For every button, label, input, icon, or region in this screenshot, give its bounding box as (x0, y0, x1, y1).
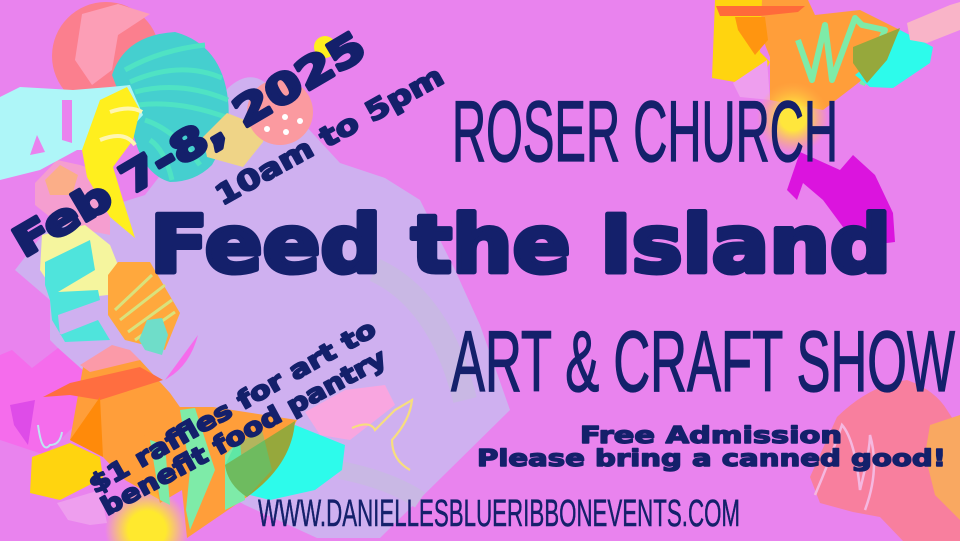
orange panel (755, 0, 900, 110)
salmon circle with dots (247, 79, 313, 145)
coral circle (52, 2, 160, 110)
yellow scribble (352, 400, 412, 470)
date: Feb 7-8, 2025 (5, 22, 374, 267)
cyan brush (250, 425, 345, 500)
teal striped dome (112, 32, 229, 182)
pink blob (35, 160, 110, 235)
orange scratched blob (108, 262, 180, 350)
raffle note: $1 raffles for art to (84, 314, 381, 499)
pink stipple brush (907, 2, 960, 43)
yellow patch (30, 443, 103, 500)
time: 10am to 5pm (209, 59, 449, 212)
green and orange stripes (143, 407, 297, 538)
bottom right coral blob (810, 380, 960, 541)
olive leaf (225, 421, 295, 497)
yellow patch (712, 0, 770, 82)
yellow dot (314, 36, 336, 58)
admission note: Please bring a canned good! (477, 446, 946, 472)
magenta brush stroke (787, 152, 895, 245)
green scrawl (798, 18, 885, 85)
admission note: Free Admission (580, 423, 842, 449)
left collage (0, 2, 412, 541)
cyan spring (45, 240, 110, 342)
admission note (477, 423, 946, 472)
heading: Feed the Island: Feed the Island (150, 199, 891, 291)
olive leaf (853, 28, 900, 83)
yellow feather (82, 87, 140, 238)
yellow glow (105, 488, 189, 541)
raffle note: benefit food pantry (96, 343, 391, 521)
large orange shape (43, 318, 198, 500)
magenta pink rectangle (0, 348, 100, 455)
lavender paint shape (15, 77, 510, 538)
top right collage (712, 0, 960, 245)
light pink stipple (57, 490, 107, 525)
pale cyan brush letters (0, 85, 143, 180)
pale yellow shape (40, 225, 120, 300)
orange band (716, 6, 805, 16)
yellow glow (757, 82, 829, 154)
cyan brush (855, 30, 933, 88)
raffle note (84, 314, 391, 521)
pale pink stipple (733, 60, 770, 100)
pink stipple brush (305, 385, 395, 440)
peach band (203, 113, 265, 167)
